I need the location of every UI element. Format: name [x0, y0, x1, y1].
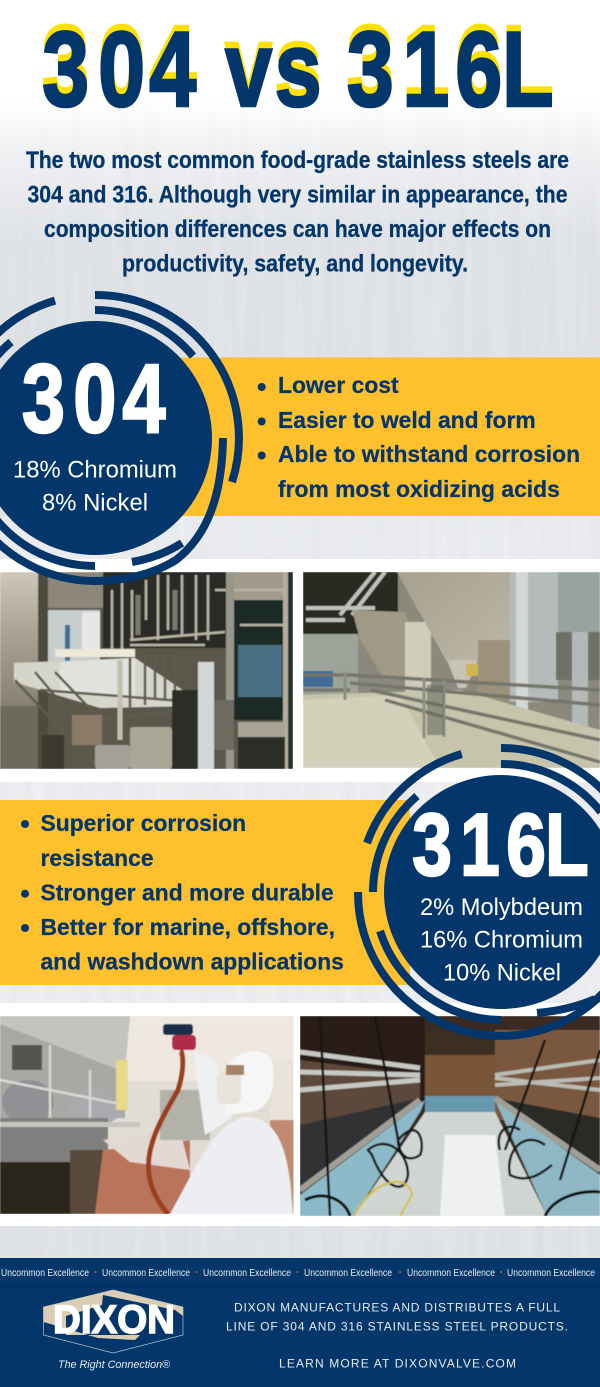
panel: 304 benefits: Able to withstand corrosion	[278, 441, 580, 467]
ticker: Uncommon Excellence: Uncommon Excellence	[203, 1267, 291, 1279]
footer	[0, 1258, 600, 1387]
text: 316L composition: 10% Nickel	[443, 960, 561, 986]
text: 316L composition	[420, 894, 583, 986]
text: 316L composition: 2% Molybdeum	[420, 894, 583, 921]
badge: 316L	[358, 748, 600, 1036]
tagline: The Right Connection®	[58, 1359, 171, 1371]
text: 316L composition: 16% Chromium	[420, 926, 583, 954]
photo: worker washing down equipment	[0, 1016, 294, 1214]
title: 304vs316L	[42, 11, 554, 129]
text: 304 composition: 18% Chromium	[13, 456, 177, 484]
panel: 304 benefits: Easier to weld and form	[278, 407, 536, 433]
photo: tanks and railings	[303, 572, 600, 768]
panel: 316L benefits: and washdown applications	[40, 948, 344, 974]
circle: 316L disc	[384, 775, 600, 1009]
panel: 304 benefits: from most oxidizing acids	[278, 476, 560, 502]
rings: 304	[0, 295, 239, 581]
title: 304vs316L	[42, 4, 554, 123]
panel: 304 benefits	[170, 358, 600, 516]
text: 304 composition	[13, 456, 177, 516]
panel: 316L benefits: Better for marine, offshore,	[40, 914, 335, 940]
ticker: Uncommon Excellence: Uncommon Excellence	[102, 1267, 190, 1279]
panel: 316L benefits	[0, 800, 410, 985]
badge: 304	[0, 295, 239, 581]
logo: Dixon: DIXON	[53, 1298, 175, 1342]
label: 316L: 316L	[412, 796, 589, 894]
panel: 316L benefits: resistance	[40, 845, 154, 871]
footer text: DIXON MANUFACTURES AND DISTRIBUTES A FULL	[234, 1300, 560, 1314]
footer text: LEARN MORE AT DIXONVALVE.COM	[279, 1356, 516, 1370]
ticker: Uncommon Excellence	[1, 1267, 595, 1279]
panel: 304 benefits: Lower cost	[278, 372, 399, 398]
photo: milking parlour	[300, 1016, 600, 1216]
panel: 316L benefits: Superior corrosion	[40, 810, 246, 836]
ticker: Uncommon Excellence: Uncommon Excellence	[1, 1267, 89, 1279]
label: 304: 304	[22, 344, 166, 453]
circle: 304 disc	[0, 321, 212, 555]
text: 304 composition: 8% Nickel	[42, 490, 148, 516]
ticker: Uncommon Excellence: Uncommon Excellence	[407, 1267, 495, 1279]
footer text	[226, 1300, 568, 1370]
photo: stainless processing equipment	[0, 572, 293, 769]
panel: 316L benefits: Stronger and more durable	[40, 880, 334, 906]
intro paragraph: productivity, safety, and longevity.	[122, 250, 468, 278]
intro paragraph	[26, 147, 569, 278]
ticker: Uncommon Excellence: Uncommon Excellence	[304, 1267, 392, 1279]
footer text: LINE OF 304 AND 316 STAINLESS STEEL PRODUCTS.	[226, 1320, 568, 1334]
rings: 316L	[358, 748, 600, 1036]
logo: Dixon	[44, 1290, 183, 1353]
